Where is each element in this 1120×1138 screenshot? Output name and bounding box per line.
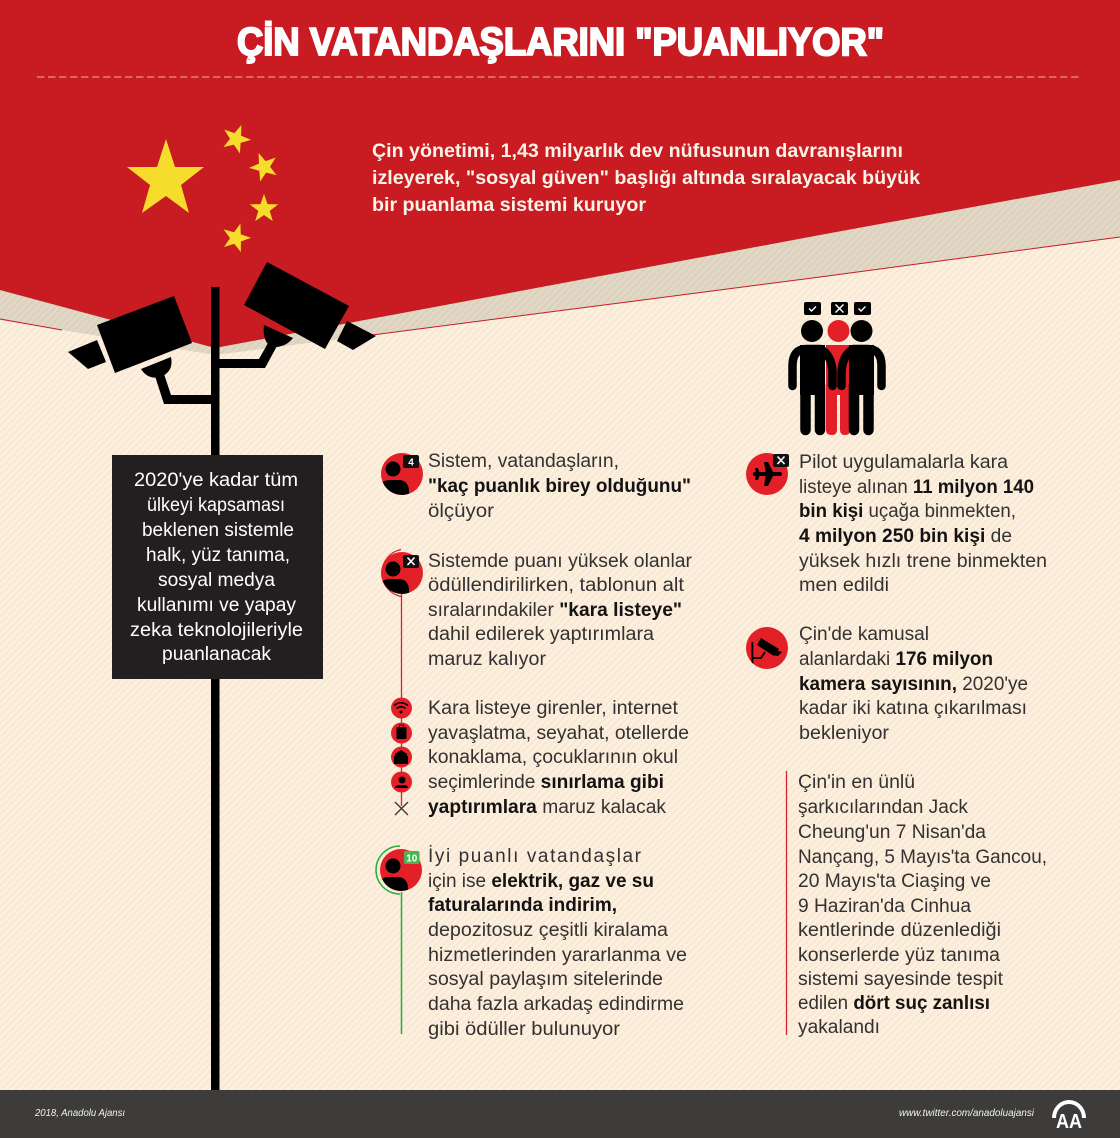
- logo: AA: AA: [1056, 1111, 1082, 1133]
- text: rewards: İyi puanlı vatandaşlar: [428, 846, 642, 867]
- text: rewards: hizmetlerinden yararlanma ve: [428, 945, 687, 966]
- text: flight ban: bin kişi uçağa binmekten,: [799, 501, 1016, 522]
- intro text: [372, 141, 920, 216]
- text: score measurement: [428, 451, 691, 522]
- text: blacklist: Sistemde puanı yüksek olanlar: [428, 551, 693, 572]
- text: concert arrests: Nançang, 5 Mayıs'ta Gancou,: [798, 847, 1047, 868]
- text: rewards: faturalarında indirim,: [428, 895, 617, 916]
- text: concert arrests: yakalandı: [798, 1017, 880, 1038]
- panel: dark summary box: kullanımı ve yapay: [137, 595, 296, 616]
- text: flight ban: men edildi: [799, 575, 889, 596]
- red edge line right: [372, 237, 1120, 335]
- text: rewards: daha fazla arkadaş edindirme: [428, 994, 684, 1015]
- text: concert arrests: edilen dört suç zanlısı: [798, 993, 990, 1014]
- text: rewards: sosyal paylaşım sitelerinde: [428, 969, 663, 990]
- panel: dark summary box: sosyal medya: [158, 570, 275, 591]
- text: concert arrests: [798, 772, 1047, 1038]
- icon: plane: [746, 453, 789, 495]
- text: camera count: kamera sayısının, 2020'ye: [799, 674, 1028, 695]
- text: concert arrests: Cheung'un 7 Nisan'da: [798, 822, 986, 843]
- panel: dark summary box: halk, yüz tanıma,: [146, 545, 290, 566]
- text: blacklist: ödüllendirilirken, tablonun alt: [428, 575, 685, 596]
- text: sanctions: yavaşlatma, seyahat, otellerde: [428, 723, 689, 744]
- red edge line left: [0, 319, 62, 330]
- text: flight ban: [799, 452, 1047, 596]
- text: camera count: kadar iki katına çıkarılması: [799, 698, 1027, 719]
- footer: [0, 1090, 1120, 1138]
- text: blacklist: [428, 551, 693, 670]
- text: camera count: bekleniyor: [799, 723, 890, 744]
- icon: hotel restriction: [391, 746, 412, 768]
- left camera body: [97, 296, 192, 373]
- icon: luggage restriction: [391, 722, 412, 744]
- red timeline line: [400, 594, 402, 806]
- panel: dark summary box: puanlanacak: [162, 644, 271, 665]
- black person left: [792, 320, 832, 430]
- footer url: www.twitter.com/anadoluajansi: [899, 1108, 1035, 1119]
- black person right: [842, 320, 882, 430]
- panel: dark summary box: 2020'ye kadar tüm: [134, 470, 298, 491]
- icon: person score 4: [380, 453, 423, 498]
- text: concert arrests: konserlerde yüz tanıma: [798, 945, 1000, 966]
- text: concert arrests: şarkıcılarından Jack: [798, 797, 968, 818]
- text: sanctions: yaptırımlara maruz kalacak: [428, 797, 666, 818]
- icon: flag stars: [127, 120, 282, 254]
- icon: small star 1: [218, 120, 255, 155]
- right camera body: [244, 262, 349, 349]
- green timeline line: [400, 892, 402, 1034]
- logo: AA: [1054, 1102, 1084, 1133]
- icon: cross: [395, 802, 408, 815]
- grey shadow band: [0, 178, 1120, 355]
- text: sanctions: seçimlerinde sınırlama gibi: [428, 772, 664, 793]
- intro text: bir puanlama sistemi kuruyor: [372, 195, 647, 216]
- panel: dark summary box: ülkeyi kapsaması: [147, 495, 285, 516]
- text: sanctions: konaklama, çocuklarının okul: [428, 747, 678, 768]
- badge: check: [804, 302, 821, 315]
- text: concert arrests: sistemi sayesinde tespit: [798, 969, 1004, 990]
- left camera mount: [141, 357, 212, 404]
- icon: camera: [746, 627, 788, 669]
- right camera mount: [218, 325, 293, 368]
- text: flight ban: listeye alınan 11 milyon 140: [799, 477, 1034, 498]
- red person: [826, 320, 850, 435]
- icon: wifi restriction: [391, 698, 412, 718]
- intro text: Çin yönetimi, 1,43 milyarlık dev nüfusunun davranışlarını: [372, 141, 903, 162]
- badge: check: [854, 302, 871, 315]
- badge: cross: [831, 302, 848, 315]
- title: ÇİN VATANDAŞLARINI "PUANLIYOR": [237, 21, 884, 64]
- icon: person blacklisted: [380, 550, 423, 597]
- text: camera count: Çin'de kamusal: [799, 624, 929, 645]
- text: rewards: gibi ödüller bulunuyor: [428, 1019, 621, 1040]
- text: rewards: için ise elektrik, gaz ve su: [428, 871, 654, 892]
- icon: small star 4: [219, 219, 254, 254]
- icon: small star 3: [250, 194, 278, 221]
- panel: dark summary box: [112, 455, 323, 679]
- text: sanctions: [428, 698, 689, 818]
- icon: person score 4: 4: [408, 458, 414, 468]
- text: flight ban: Pilot uygulamalarla kara: [799, 452, 1008, 473]
- left camera lens: [68, 340, 106, 369]
- text: rewards: [428, 846, 687, 1040]
- text: sanctions: Kara listeye girenler, internet: [428, 698, 679, 719]
- text: flight ban: yüksek hızlı trene binmekten: [799, 551, 1047, 572]
- text: blacklist: sıralarındakiler "kara listeye": [428, 600, 682, 621]
- right camera lens: [337, 321, 376, 350]
- text: camera count: [799, 624, 1028, 744]
- icon: three people: [792, 302, 882, 435]
- text: concert arrests: 20 Mayıs'ta Ciaşing ve: [798, 871, 991, 892]
- text: blacklist: maruz kalıyor: [428, 649, 547, 670]
- text: rewards: depozitosuz çeşitli kiralama: [428, 920, 668, 941]
- text: concert arrests: Çin'in en ünlü: [798, 772, 915, 793]
- red side line: [786, 771, 788, 1035]
- icon: large star: [127, 139, 204, 213]
- text: score measurement: Sistem, vatandaşların,: [428, 451, 619, 472]
- text: camera count: alanlardaki 176 milyon: [799, 649, 993, 670]
- text: score measurement: "kaç puanlık birey olduğunu": [428, 476, 691, 497]
- icon: person score 10: 10: [406, 854, 418, 864]
- text: concert arrests: 9 Haziran'da Cinhua: [798, 896, 971, 917]
- footer credit: 2018, Anadolu Ajansı: [34, 1108, 125, 1119]
- panel: dark summary box: zeka teknolojileriyle: [130, 620, 303, 641]
- title divider: [37, 76, 1081, 78]
- panel: dark summary box: beklenen sistemle: [142, 520, 294, 541]
- icon: school restriction: [391, 772, 412, 792]
- icon: surveillance cameras on pole: [68, 262, 376, 1090]
- intro text: izleyerek, "sosyal güven" başlığı altında sıralayacak büyük: [372, 168, 920, 189]
- icon: small star 2: [245, 148, 282, 183]
- text: flight ban: 4 milyon 250 bin kişi de: [799, 526, 1012, 547]
- text: concert arrests: kentlerinde düzenlediği: [798, 920, 1001, 941]
- text: blacklist: dahil edilerek yaptırımlara: [428, 624, 654, 645]
- text: score measurement: ölçüyor: [428, 501, 495, 522]
- icon: person score 10: [376, 846, 422, 894]
- pole: [211, 287, 220, 1090]
- red header shape: [0, 0, 1120, 348]
